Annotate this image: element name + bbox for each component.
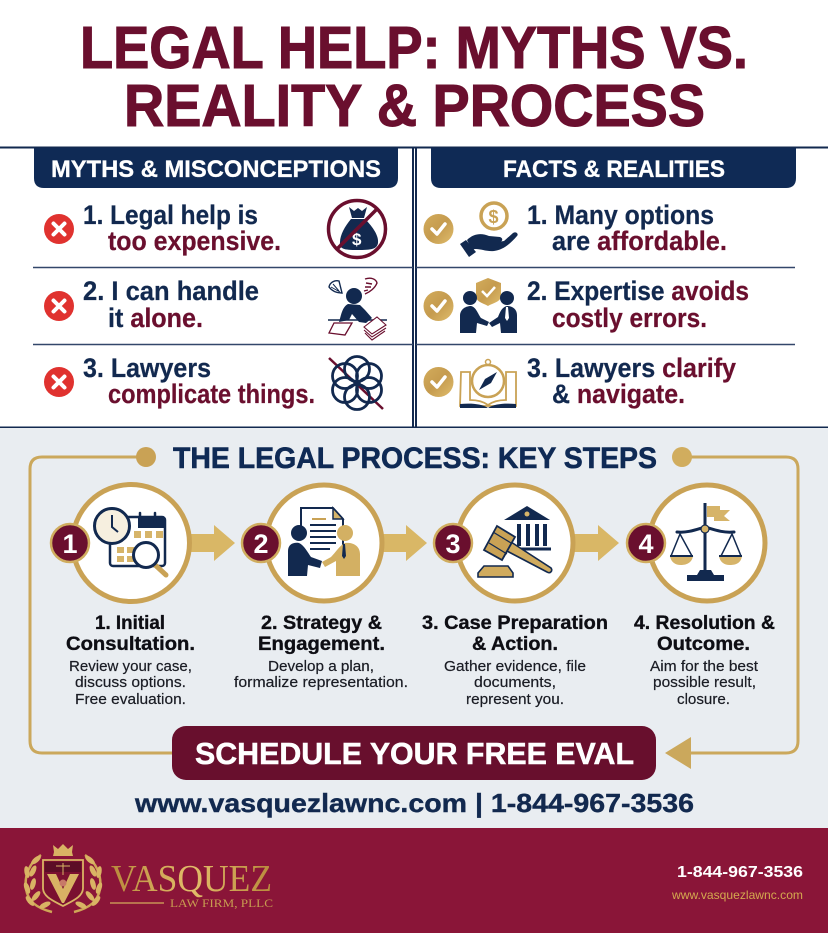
- badge 3: [434, 524, 472, 562]
- fact 3: & navigate.: [552, 379, 685, 409]
- step 4: possible result,: [653, 674, 756, 691]
- logo: [23, 844, 273, 912]
- myth 2: 2. I can handle: [83, 276, 259, 306]
- step 4: Aim for the best: [650, 658, 759, 675]
- fact 1: 1. Many options: [527, 200, 714, 230]
- step 3: 3. Case Preparation: [422, 612, 608, 634]
- myth 2: [44, 276, 387, 340]
- fact 1: [424, 200, 727, 257]
- icon: crossed money bag: [328, 200, 386, 258]
- badge 1: 1: [62, 529, 78, 559]
- gold connector left: [30, 447, 172, 753]
- facts heading: [431, 148, 796, 188]
- step 2: 2. Strategy &: [261, 612, 382, 634]
- fact 2: 2. Expertise avoids: [527, 276, 749, 306]
- step 1: Review your case,: [69, 658, 192, 675]
- logo: LAW FIRM, PLLC: [170, 898, 273, 910]
- myth 3: 3. Lawyers: [83, 353, 211, 383]
- process heading: THE LEGAL PROCESS: KEY STEPS: [173, 442, 657, 475]
- step 3: Gather evidence, file: [444, 658, 586, 675]
- panel: legal process: [0, 428, 828, 828]
- step 1: [51, 484, 195, 708]
- icon: tangled knot: [329, 356, 383, 410]
- badge 1: [51, 524, 89, 562]
- facts heading: FACTS & REALITIES: [503, 156, 725, 183]
- step 3: [422, 485, 608, 708]
- panel: facts: [416, 148, 796, 409]
- title: REALITY & PROCESS: [124, 73, 705, 139]
- step 4: Outcome.: [657, 633, 750, 655]
- icon: crossed money bag: $: [352, 230, 362, 249]
- myth 3: [44, 353, 383, 410]
- step 1: 1. Initial: [95, 612, 165, 634]
- step 4: closure.: [677, 691, 730, 708]
- badge 3: 3: [445, 529, 461, 559]
- icon: document and handshake: [288, 508, 360, 576]
- icon: handshake with shield: [460, 278, 517, 333]
- logo crest: [23, 844, 103, 912]
- title: LEGAL HELP: MYTHS VS.: [80, 15, 748, 81]
- arrow: step 1 to 2: [190, 525, 235, 561]
- step 2: Engagement.: [258, 633, 385, 655]
- footer contact: [671, 864, 803, 902]
- badge 4: 4: [638, 529, 654, 559]
- arrow: step 2 to 3: [382, 525, 427, 561]
- icon: compass on book: [460, 360, 516, 408]
- step 4: [627, 485, 775, 708]
- myth 1: [44, 200, 386, 258]
- icon: stressed person at desk: [328, 278, 387, 340]
- icon: scales of justice with flag: [670, 503, 742, 581]
- fact 2: costly errors.: [552, 303, 707, 333]
- step 1: discuss options.: [75, 674, 186, 691]
- step 1: Free evaluation.: [75, 691, 186, 708]
- myths heading: MYTHS & MISCONCEPTIONS: [51, 156, 381, 183]
- contact line: www.vasquezlawnc.com | 1-844-967-3536: [134, 788, 694, 818]
- badge 4: [627, 524, 665, 562]
- footer: [0, 828, 828, 933]
- myth 1: 1. Legal help is: [83, 200, 258, 230]
- step 3: represent you.: [466, 691, 564, 708]
- fact 3: 3. Lawyers clarify: [527, 353, 736, 383]
- step 3: & Action.: [472, 633, 558, 655]
- step 3: documents,: [474, 674, 556, 691]
- fact 2: [424, 276, 749, 333]
- panel: myths: [33, 148, 413, 410]
- footer contact: www.vasquezlawnc.com: [671, 888, 803, 902]
- icon: courthouse and gavel: [478, 506, 552, 577]
- step 1: Consultation.: [66, 633, 195, 655]
- myth 3: complicate things.: [108, 379, 315, 409]
- fact 3: [424, 353, 736, 409]
- icon: clock, calendar and magnifier: [94, 508, 166, 575]
- badge 2: 2: [253, 529, 269, 559]
- gold connector right with arrow: [665, 447, 798, 769]
- step 4: 4. Resolution &: [634, 612, 775, 634]
- call-to-action button: SCHEDULE YOUR FREE EVAL: [195, 736, 634, 771]
- myths heading: [34, 148, 398, 188]
- step 2: formalize representation.: [234, 674, 408, 691]
- badge 2: [242, 524, 280, 562]
- fact 1: are affordable.: [552, 226, 727, 256]
- footer contact: 1-844-967-3536: [677, 864, 803, 881]
- icon: hand holding coin: $: [488, 207, 499, 227]
- call-to-action button: [172, 726, 656, 780]
- myth 2: it alone.: [108, 303, 203, 333]
- title: [80, 15, 748, 139]
- logo: VASQUEZ: [111, 858, 272, 900]
- icon: hand holding coin: [460, 203, 518, 257]
- step 2: Develop a plan,: [268, 658, 374, 675]
- myth 1: too expensive.: [108, 226, 281, 256]
- step 2: [234, 485, 408, 691]
- arrow: step 3 to 4: [574, 525, 619, 561]
